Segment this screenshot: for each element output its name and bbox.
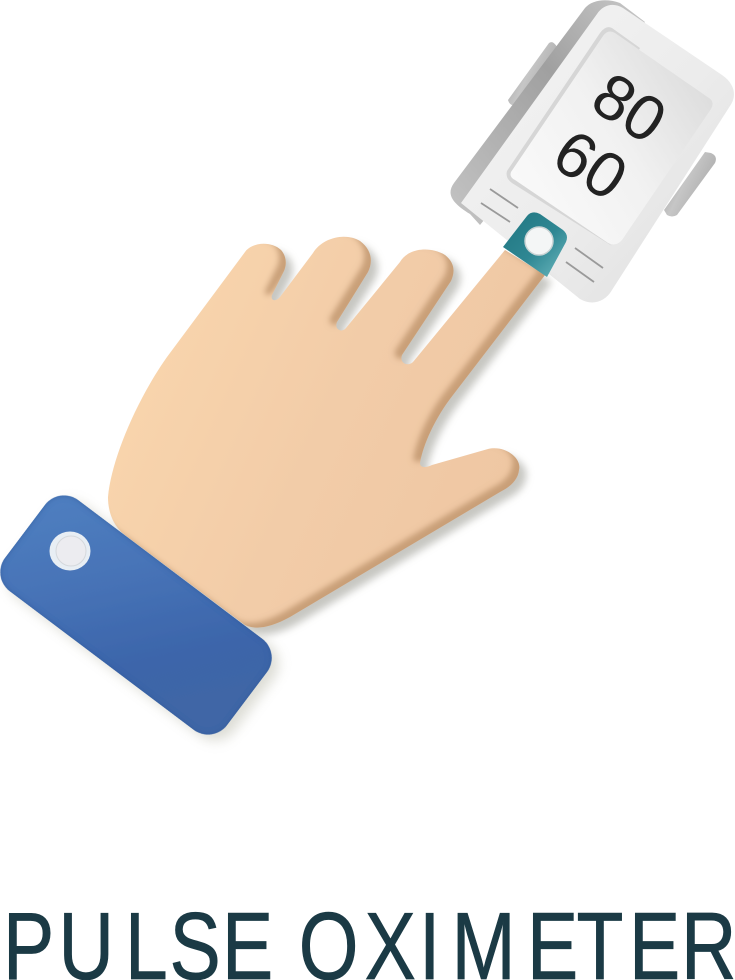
device front face (461, 5, 734, 302)
left side button (508, 42, 557, 110)
screen edge (507, 27, 640, 246)
clip button (525, 227, 553, 255)
reading: 80: 80 (580, 58, 679, 157)
cuff button centre (56, 536, 86, 566)
hand shadow (115, 244, 552, 635)
right side button (664, 152, 716, 216)
device back edge (451, 0, 645, 225)
cuff body (0, 486, 281, 744)
indicator lines (481, 189, 603, 282)
icon: shirt cuff (0, 486, 288, 750)
icon: hand (108, 237, 545, 628)
cuff shadow (0, 492, 288, 750)
icon: teal finger clip (503, 212, 567, 277)
screen (510, 32, 713, 244)
cuff button (50, 532, 90, 570)
clip body (503, 212, 567, 277)
icon: pulse oximeter device (451, 0, 734, 302)
reading: 60: 60 (541, 115, 640, 214)
